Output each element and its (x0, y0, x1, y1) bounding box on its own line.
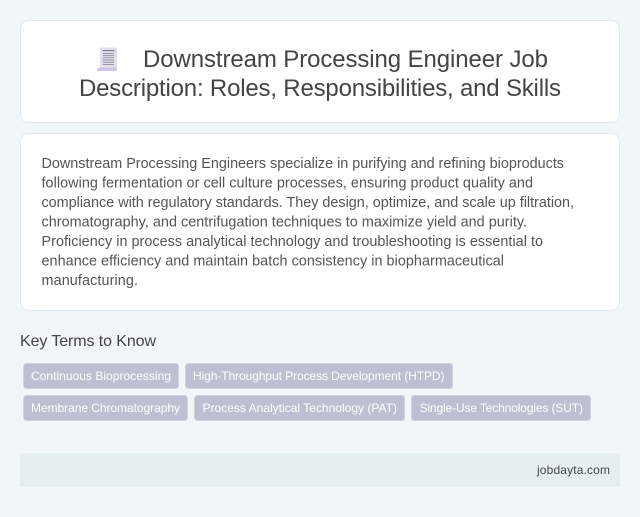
text block: description: Proficiency in process analytical technology and troubleshooting is essential to (42, 234, 543, 250)
text block: description: chromatography, and centrifugation techniques to maximize yield and purity. (42, 214, 527, 230)
tag: PAT: Process Analytical Technology (PAT) (202, 401, 397, 415)
footer: jobdayta.com (536, 463, 610, 477)
footer (20, 453, 620, 487)
text block: description: compliance with regulatory standards. They design, optimize, and scale up filtration, (42, 195, 574, 211)
heading: Description: Roles, Responsibilities, and Skills (79, 75, 561, 102)
tag: HTPD: High-Throughput Process Development (HTPD) (193, 369, 444, 383)
text block: description: manufacturing. (42, 273, 138, 289)
tag: membrane chromatography (24, 396, 188, 420)
panel: description (20, 134, 620, 310)
text block: description: following fermentation or cell culture processes, ensuring product quality and (42, 176, 533, 192)
heading: key terms: Key Terms to Know (20, 333, 156, 350)
tag: SUT (412, 396, 590, 420)
tag: PAT (194, 396, 404, 420)
heading: Downstream Processing Engineer Job (143, 46, 548, 73)
tag: HTPD (186, 364, 452, 388)
tag: SUT: Single-Use Technologies (SUT) (420, 401, 583, 415)
tag: continuous bioprocessing: Continuous Bioprocessing (31, 369, 171, 383)
text block: description: enhance efficiency and maintain batch consistency in biopharmaceutical (42, 254, 504, 270)
text block: description: Downstream Processing Engineers specialize in purifying and refining bioproducts (42, 156, 564, 172)
tag: continuous bioprocessing (24, 364, 178, 388)
tag: membrane chromatography: Membrane Chromatography (31, 401, 180, 415)
heading (79, 46, 561, 102)
icon: document scroll (97, 48, 117, 71)
text block: description (42, 156, 574, 289)
tag group (24, 364, 590, 420)
panel: title card (20, 20, 620, 122)
